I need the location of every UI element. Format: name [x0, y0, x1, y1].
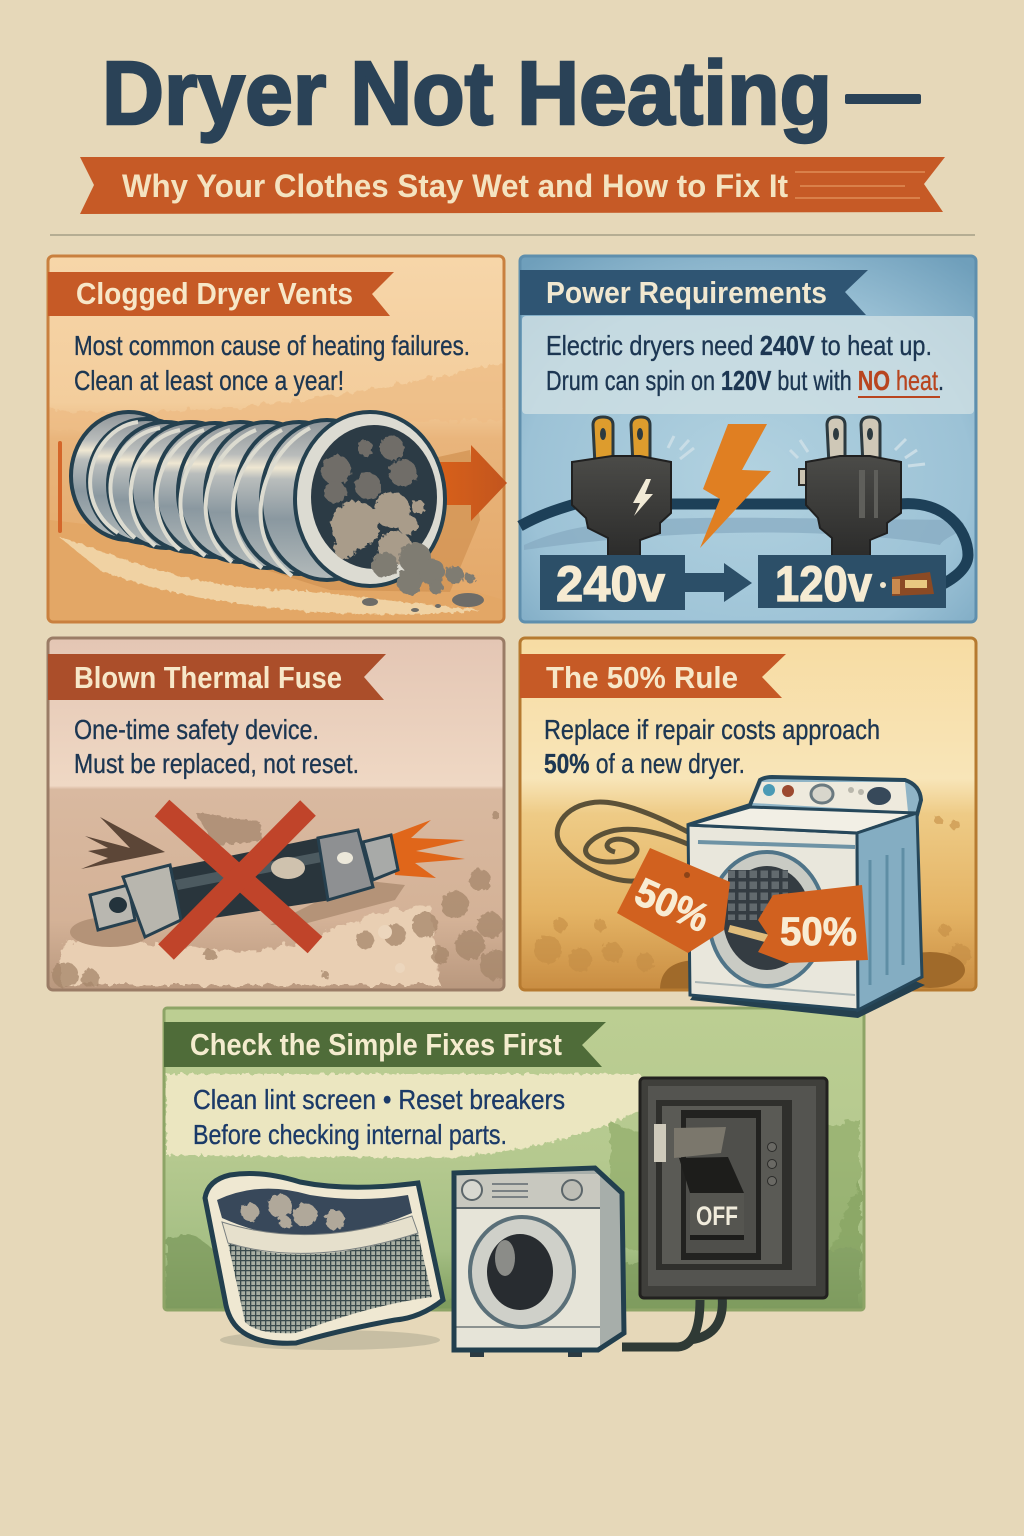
heading ribbon	[48, 654, 386, 700]
tag 50% right: 50%	[780, 910, 857, 954]
arrow	[685, 563, 752, 602]
subtitle ribbon: Why Your Clothes Stay Wet and How to Fix It	[122, 168, 788, 204]
body text: One-time safety device.	[74, 714, 319, 745]
panel: clogged dryer vents	[48, 256, 507, 625]
icon: lint screen	[205, 1174, 443, 1350]
body text: Most common cause of heating failures.	[74, 330, 470, 361]
body text	[546, 330, 944, 396]
body text: Clean at least once a year!	[74, 365, 344, 396]
body text: Electric dryers need 240V to heat up.	[546, 330, 932, 361]
icon: 240V plug	[572, 417, 694, 556]
title: Dryer Not Heating	[102, 44, 832, 144]
icon: red cross	[162, 808, 315, 952]
tick mark	[58, 441, 62, 533]
panel: blown thermal fuse	[48, 638, 510, 990]
heading ribbon	[520, 654, 786, 698]
heading ribbon	[520, 270, 868, 315]
label 240V: 240v	[556, 556, 665, 612]
cord	[520, 504, 968, 590]
body text	[193, 1084, 565, 1150]
icon: fuse	[70, 817, 465, 947]
title dash	[845, 94, 921, 104]
heading ribbon: Blown Thermal Fuse	[74, 660, 342, 695]
body text: 50% of a new dryer.	[544, 748, 745, 779]
cable	[622, 1295, 722, 1347]
heading ribbon: Check the Simple Fixes First	[190, 1027, 562, 1062]
icon: 120V plug	[790, 417, 925, 556]
body text	[74, 330, 470, 396]
tag 50% left: 50%	[628, 870, 716, 941]
icon: dryer	[454, 1168, 624, 1357]
heading ribbon: Clogged Dryer Vents	[76, 276, 353, 311]
tag 50% right	[758, 885, 868, 963]
icon: swirl cord	[557, 802, 690, 881]
subtitle ribbon	[80, 157, 945, 214]
icon: breaker box	[640, 1078, 827, 1298]
body text: Must be replaced, not reset.	[74, 748, 359, 779]
body text: Before checking internal parts.	[193, 1119, 507, 1150]
off label: OFF	[696, 1201, 738, 1231]
plug end	[880, 572, 934, 596]
icon: lightning bolt	[700, 424, 771, 548]
panel: 50% rule	[520, 638, 976, 1018]
body text: Clean lint screen • Reset breakers	[193, 1084, 565, 1115]
body text	[74, 714, 359, 779]
arrow	[440, 445, 507, 521]
icon: clogged duct	[71, 412, 484, 612]
divider	[50, 234, 975, 236]
heading ribbon: Power Requirements	[546, 275, 827, 310]
tag 50% left	[617, 848, 730, 953]
icon: washer	[688, 777, 925, 1018]
body text: Drum can spin on 120V but with NO heat.	[546, 365, 944, 396]
label 120V	[758, 555, 946, 612]
panel: power requirements	[520, 256, 976, 622]
body text	[544, 714, 880, 779]
heading ribbon: The 50% Rule	[546, 660, 738, 695]
body text: Replace if repair costs approach	[544, 714, 880, 745]
panel: simple fixes	[164, 1008, 864, 1357]
label 120V: 120v	[775, 556, 872, 612]
